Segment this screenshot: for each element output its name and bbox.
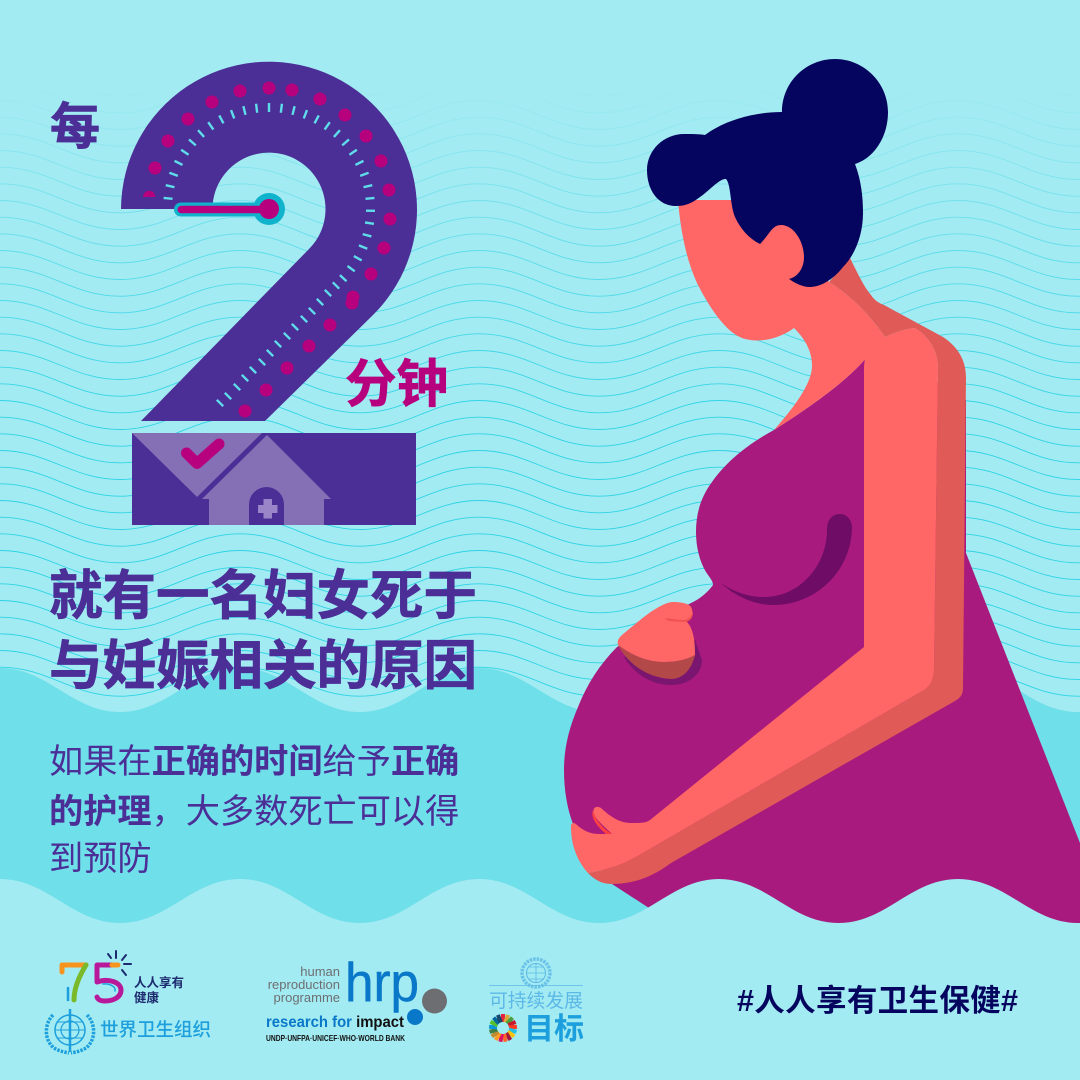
body text: ，大多数死亡可以得 [152, 793, 459, 831]
panel background [132, 433, 416, 525]
programme name: reproduction [268, 977, 340, 992]
top hand shadow side [618, 645, 695, 679]
logo: WHO 75 [46, 951, 211, 1053]
WHO name: 世界卫生组织 [100, 1019, 211, 1040]
dress fold: breast shadow [721, 514, 852, 605]
medical cross [258, 499, 278, 518]
shoulder and neck: shadow side [588, 258, 966, 884]
label: every: 每 [50, 99, 100, 155]
divider [489, 984, 583, 986]
tagline: 人人享有 [134, 975, 184, 990]
label: minutes: 分钟 [345, 355, 448, 413]
dress [564, 343, 1080, 960]
goals text: 目标 [524, 1013, 584, 1046]
check mark [186, 444, 219, 464]
hair [647, 59, 888, 287]
top hand shadow on dress [624, 640, 702, 685]
body text: 到预防 [49, 840, 152, 878]
sun rays [108, 951, 131, 975]
minute ticks [164, 103, 375, 406]
clock numeral 2 [121, 62, 417, 421]
75 numeral [62, 965, 121, 1001]
pink dots [143, 82, 396, 418]
logo: SDG [489, 959, 584, 1046]
thumb fold [592, 810, 612, 834]
body text: 如果在 [49, 743, 152, 781]
grey circle [422, 988, 447, 1014]
numeral shape [121, 62, 417, 421]
door [249, 487, 284, 525]
logo: HRP [266, 951, 447, 1043]
sustainable development text: 可持续发展 [489, 990, 583, 1011]
house [202, 435, 331, 525]
heading: 就有一名妇女死于 [49, 567, 477, 626]
hrp wordmark: hrp [345, 951, 419, 1013]
blue circle [407, 1009, 423, 1025]
body text: 的护理 [49, 793, 152, 831]
programme name: programme [274, 990, 340, 1005]
SDG wheel [489, 1014, 517, 1042]
UN emblem [522, 959, 550, 987]
top hand [618, 602, 695, 662]
figure: pregnant woman [564, 59, 1080, 960]
programme name: human [300, 964, 340, 979]
tagline: 健康 [134, 990, 160, 1005]
arm [571, 328, 938, 873]
envelope flap [132, 433, 262, 497]
body text: 正确的时间给予正确 [152, 743, 459, 781]
clinic icon panel [132, 433, 416, 525]
heading: 与妊娠相关的原因 [49, 637, 477, 696]
top hand thumb crease [666, 612, 693, 622]
light wave foreground [0, 879, 1080, 1080]
neck and face [678, 200, 885, 430]
WHO emblem [46, 1009, 94, 1053]
partners: UNDP·UNFPA·UNICEF·WHO·WORLD BANK [266, 1033, 406, 1043]
clock hand [174, 193, 285, 225]
tagline: research for impact [266, 1014, 404, 1031]
hashtag: #人人享有卫生保健# [737, 984, 1018, 1018]
wave band: darker water [0, 668, 1080, 960]
